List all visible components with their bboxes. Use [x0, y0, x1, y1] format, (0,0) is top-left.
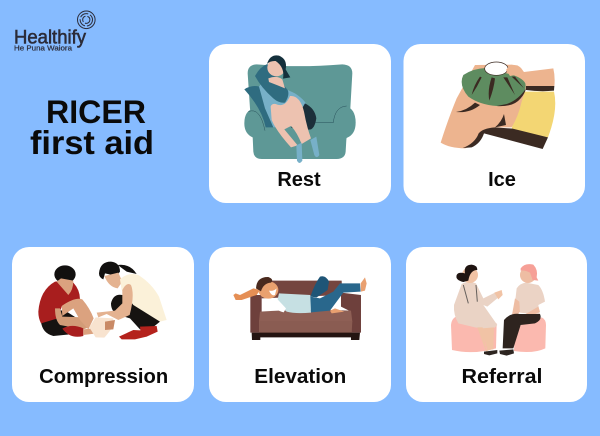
panel: Ice	[404, 44, 585, 203]
panel: Elevation	[209, 247, 391, 402]
label: Referral: Referral	[462, 366, 542, 388]
card background	[406, 247, 587, 402]
panel: Referral	[406, 247, 587, 402]
panel: Compression	[12, 247, 194, 402]
logo wordmark: Healthify	[14, 27, 86, 48]
label: Rest: Rest	[277, 169, 321, 191]
logo tagline: He Puna Waiora	[14, 44, 73, 53]
illustration: woman resting on armchair	[244, 55, 356, 163]
illustration: doctor talking with patient	[451, 264, 546, 356]
label: Compression: Compression	[39, 366, 168, 388]
illustration: ice pack on knee	[441, 62, 555, 149]
logo: Healthify He Puna Waiora	[14, 11, 95, 53]
card background	[12, 247, 194, 402]
panel: Rest	[209, 44, 391, 203]
label: Elevation: Elevation	[254, 366, 346, 388]
logo icon: concentric rings	[78, 11, 95, 29]
card background	[404, 44, 585, 203]
title line 2: first aid	[30, 125, 154, 162]
title: RICER first aid	[30, 94, 154, 162]
label: Ice: Ice	[488, 169, 516, 191]
title line 1: RICER	[46, 94, 146, 130]
illustration: woman bandaging a boy's ankle	[38, 262, 167, 339]
card background	[209, 247, 391, 402]
card background	[209, 44, 391, 203]
illustration: man lying on sofa with raised legs	[233, 276, 367, 340]
